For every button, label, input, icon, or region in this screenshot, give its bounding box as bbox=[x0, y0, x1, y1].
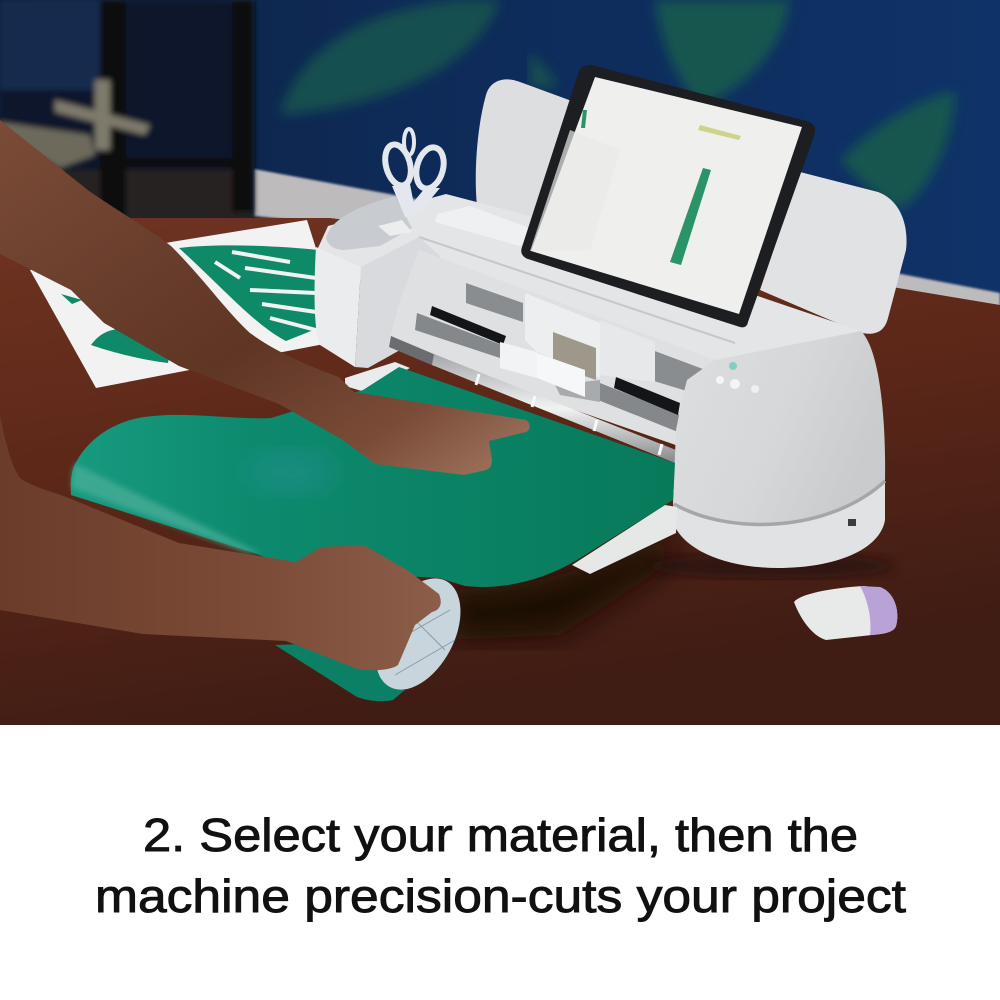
back lid right bbox=[760, 172, 907, 334]
front rail bbox=[389, 336, 436, 366]
left housing bbox=[315, 247, 361, 367]
photo: cutting machine scene bbox=[0, 0, 1000, 725]
shadow beneath sheet bbox=[440, 535, 680, 640]
vinyl roll bbox=[275, 640, 440, 701]
tablet bbox=[521, 65, 815, 327]
buttons bbox=[716, 376, 724, 384]
mat roll end bbox=[358, 564, 478, 704]
top deck bbox=[318, 194, 875, 372]
cavity bbox=[388, 250, 715, 450]
back lid left bbox=[476, 79, 580, 240]
cutting machine bbox=[315, 79, 907, 574]
paper with leaf print bbox=[30, 220, 345, 388]
wooden table bbox=[0, 218, 1000, 725]
carriage bbox=[500, 293, 655, 402]
green vinyl sheet bbox=[71, 367, 675, 587]
caption line 1: 2. Select your material, then the bbox=[143, 809, 858, 861]
scraper tool bbox=[794, 586, 897, 640]
loader plate bbox=[345, 362, 410, 392]
caption line 2: machine precision-cuts your project bbox=[95, 870, 906, 922]
storage cup bbox=[326, 196, 412, 250]
upper arm and hand bbox=[0, 120, 530, 475]
front tray bbox=[572, 505, 677, 574]
scissors bbox=[381, 129, 448, 217]
lower arm and hand bbox=[0, 416, 441, 670]
shelf furniture bbox=[0, 0, 254, 220]
feed blocks bbox=[466, 283, 711, 392]
housing base bbox=[673, 481, 885, 568]
caption heading bbox=[95, 809, 906, 922]
back rollers bbox=[415, 313, 680, 432]
background wall bbox=[0, 0, 1000, 310]
baseboard bbox=[254, 169, 1000, 310]
right housing bbox=[673, 331, 885, 524]
